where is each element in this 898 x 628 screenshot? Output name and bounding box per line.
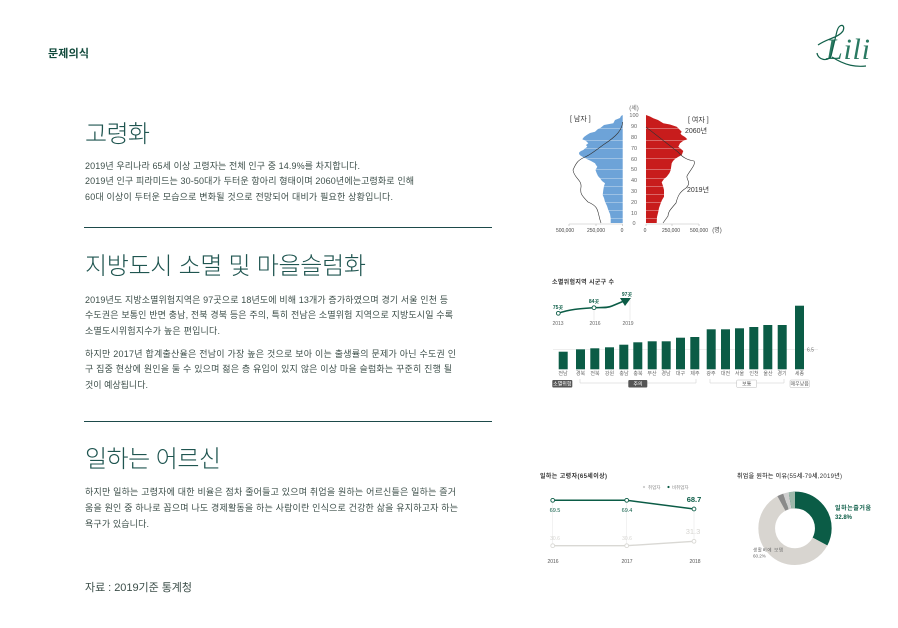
region labels: 부산	[647, 370, 657, 377]
age labels: 50	[631, 167, 637, 173]
category pills: 매우낮음	[790, 381, 809, 388]
chart title: 취업을 원하는 이유(55세-79세,2019년)	[737, 472, 842, 480]
series labels: 2060년	[685, 126, 707, 135]
region labels: 전북	[590, 370, 600, 377]
year labels	[547, 559, 701, 565]
region labels	[558, 370, 804, 377]
text block: working seniors: 하지만 일하는 고령자에 대한 비율은 점차 줄어들고 있으며 취업을 원하는 어르신들은 일하는 즐거	[85, 486, 456, 497]
logo	[817, 25, 870, 66]
legend: 비취업자	[672, 484, 689, 491]
population labels: 500,000	[690, 228, 708, 234]
threshold label: 6.5	[807, 348, 814, 354]
age labels: 30	[631, 189, 637, 195]
section: working seniors	[85, 446, 458, 529]
region labels: 광주	[706, 370, 716, 377]
region labels: 제주	[690, 370, 700, 377]
region labels: 서울	[735, 370, 744, 377]
source note: 자료 : 2019기준 통계청	[85, 581, 192, 594]
age labels: 40	[631, 178, 637, 184]
population labels: (명)	[712, 226, 722, 234]
axis	[569, 224, 699, 226]
trend line	[552, 292, 634, 327]
section: local extinction	[85, 253, 456, 390]
year labels: 2017	[621, 559, 633, 565]
year labels: 2018	[689, 559, 701, 565]
logo swoosh	[817, 25, 866, 66]
brackets	[580, 379, 784, 383]
population labels: 0	[644, 228, 647, 234]
series labels: 2019년	[687, 185, 709, 194]
trend line: 97곳	[622, 292, 632, 298]
chart: reasons for wanting work donut	[737, 472, 871, 558]
trend line: 2016	[589, 321, 601, 327]
region labels: 인천	[749, 370, 759, 377]
chart: working seniors line chart	[540, 472, 701, 565]
series: non-employed: 69.4	[622, 508, 632, 514]
series: non-employed: 69.5	[550, 508, 560, 514]
legend	[643, 484, 689, 491]
age labels: (세)	[629, 104, 639, 112]
heading: aging: 고령화	[85, 121, 150, 148]
series labels: [ 남자 ]	[570, 114, 591, 123]
section: aging	[85, 121, 414, 202]
label: living expenses	[753, 546, 783, 558]
population labels	[556, 226, 722, 234]
text block: local extinction: 소멸도시위험지수가 높은 편입니다.	[85, 325, 220, 336]
chart: population pyramid	[556, 104, 722, 234]
series: non-employed: 68.7	[687, 495, 701, 504]
category pills	[552, 380, 809, 388]
page title: 문제의식	[48, 46, 89, 60]
region labels: 경기	[777, 370, 787, 377]
text block: local extinction	[85, 294, 456, 390]
female bars	[646, 115, 687, 223]
heading: working seniors: 일하는 어르신	[85, 446, 221, 473]
text block: local extinction: 2019년도 지방소멸위험지역은 97곳으로 18년도에 비해 13개가 증가하였으며 경기 서울 인천 등	[85, 294, 448, 305]
heading: local extinction: 지방도시 소멸 및 마을슬럼화	[85, 253, 366, 280]
text block: aging: 2019년 우리나라 65세 이상 고령자는 전체 인구 중 14.9%를 차지합니다.	[85, 160, 360, 171]
age labels: 70	[631, 146, 637, 152]
series labels: [ 여자 ]	[688, 115, 709, 124]
region labels: 대구	[676, 370, 685, 377]
legend: 취업자	[648, 484, 661, 491]
label: living expenses: 생활비에 보탬	[753, 546, 783, 554]
bar gaps	[575, 128, 695, 219]
text block: aging	[85, 160, 414, 202]
region labels: 울산	[763, 370, 773, 377]
text block: aging: 2019년 인구 피라미드는 30-50대가 두터운 항아리 형태이며 2060년에는고령화로 인해	[85, 175, 414, 186]
text block: local extinction: 것이 예상됩니다.	[85, 380, 148, 390]
category pills: 보통	[742, 382, 752, 388]
year labels: 2016	[547, 559, 559, 565]
region labels: 경북	[576, 370, 585, 377]
region labels: 강원	[605, 370, 614, 377]
age labels: 0	[632, 221, 636, 227]
chart: extinction risk bars	[552, 278, 818, 388]
population labels: 0	[621, 228, 624, 234]
text block: working seniors: 움을 원인 중 하나로 꼽으며 나도 경제활동을 하는 사람이란 인식으로 건강한 삶을 유지하고자 하는	[85, 502, 458, 513]
series labels	[570, 114, 709, 194]
age labels: 10	[631, 211, 637, 217]
series: non-employed	[550, 495, 701, 514]
region labels: 충남	[619, 370, 629, 377]
text block: local extinction: 하지만 2017년 합계출산율은 전남이 가장 높은 것으로 보아 이는 출생률의 문제가 아닌 수도권 인	[85, 348, 456, 359]
label: enjoy work: 32.8%	[835, 515, 853, 521]
category pills: 소멸위험	[553, 381, 572, 388]
series: employed	[550, 527, 700, 548]
age labels: 90	[631, 124, 637, 130]
population labels: 500,000	[556, 228, 574, 234]
series: employed: 30.6	[622, 536, 632, 542]
series: employed: 31.3	[686, 527, 700, 536]
age labels	[629, 104, 639, 227]
trend line: 2013	[552, 321, 564, 327]
chart title: 소멸위험지역 시군구 수	[552, 278, 614, 286]
trend line: 84곳	[589, 299, 599, 305]
text block: aging: 60대 이상이 두터운 모습으로 변화될 것으로 전망되어 대비가 필요한 상황입니다.	[85, 191, 393, 202]
age labels: 60	[631, 157, 637, 163]
label: living expenses: 60.2%	[753, 554, 766, 558]
label: enjoy work: 일하는즐거움	[835, 504, 871, 512]
text block: working seniors: 욕구가 있습니다.	[85, 518, 149, 529]
2060 male line	[573, 122, 623, 223]
donut	[767, 500, 823, 557]
population labels: 250,000	[662, 228, 680, 234]
series: employed: 30.6	[550, 536, 560, 542]
category pills: 주의	[633, 381, 643, 388]
region labels: 경남	[661, 370, 671, 377]
region labels: 대전	[721, 370, 730, 377]
male bars	[579, 115, 623, 223]
label: enjoy work	[835, 504, 871, 521]
text block: local extinction: 구 집중 현상에 원인을 둘 수 있으며 젊은 층 유입이 있지 않은 이상 마을 슬럼화는 꾸준히 진행 될	[85, 363, 452, 374]
population labels: 250,000	[587, 228, 605, 234]
2060 female line	[646, 127, 694, 223]
region labels: 충북	[633, 370, 643, 377]
age labels: 20	[631, 200, 637, 206]
region labels: 전남	[558, 370, 568, 377]
chart title: 일하는 고령자(65세이상)	[540, 472, 607, 480]
logo wordmark: Lili	[825, 33, 870, 66]
age labels: 100	[629, 113, 639, 119]
region labels: 세종	[795, 370, 804, 377]
age labels: 80	[631, 135, 637, 141]
trend line: 2019	[622, 321, 634, 327]
trend line: 75곳	[553, 305, 563, 311]
text block: working seniors	[85, 486, 458, 529]
text block: local extinction: 수도권은 보통인 반면 충남, 전북 경북 등은 주의, 특히 전남은 소멸위험 지역으로 지방도시일 수록	[85, 309, 453, 320]
bars	[559, 306, 804, 369]
